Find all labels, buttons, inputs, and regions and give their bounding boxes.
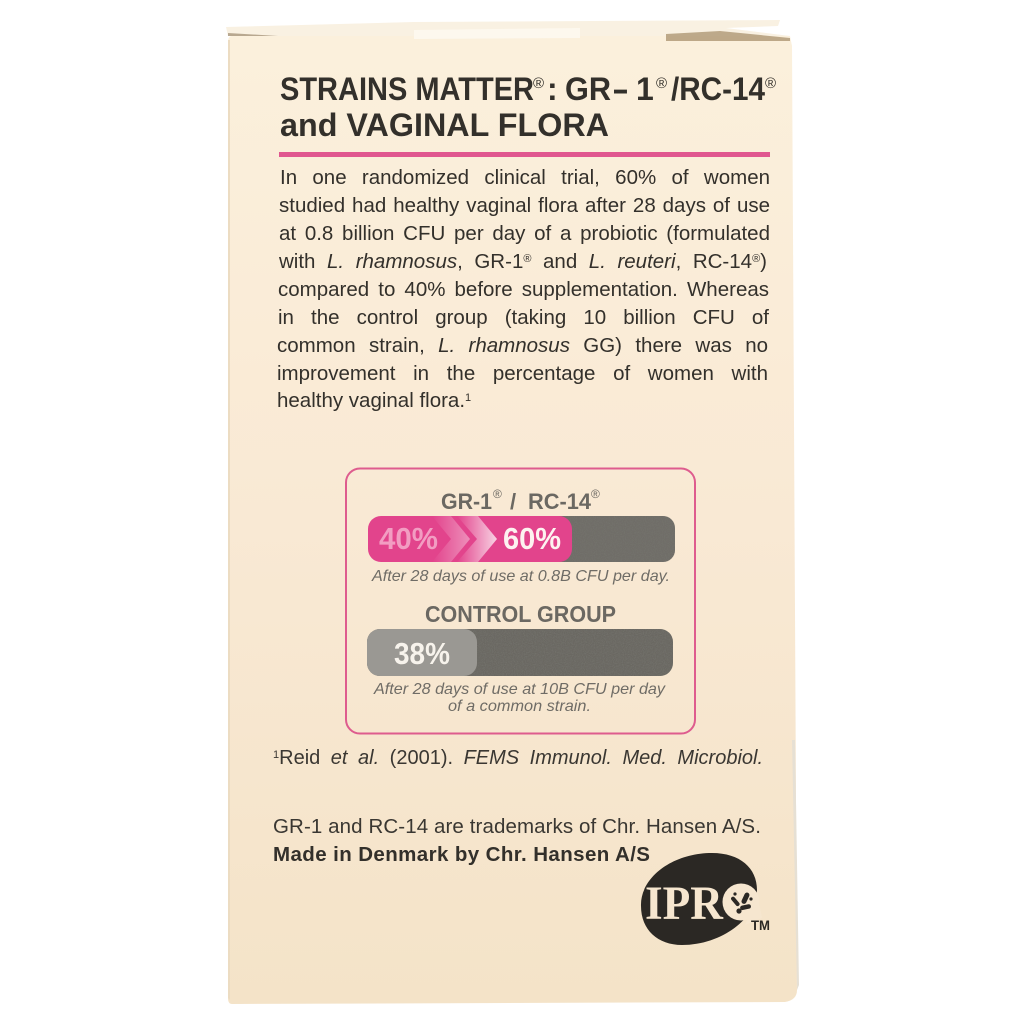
heading: GR-1 / RC-14: / — [510, 489, 516, 514]
left edge shading — [228, 40, 230, 1000]
bar: GR-1 / RC-14 result: 60% — [503, 521, 561, 556]
bar: GR-1 / RC-14 result: 40% — [379, 521, 438, 556]
body paragraph: studied had healthy vaginal flora after 28 days of use — [279, 194, 770, 217]
icon: IPRO logo: TM — [751, 917, 770, 933]
title: ® — [533, 75, 544, 92]
top flap — [226, 20, 790, 41]
heading: GR-1 / RC-14 — [441, 487, 600, 514]
title: ® — [656, 75, 667, 92]
body paragraph: compared to 40% before supplementation. Whereas — [278, 278, 769, 301]
heading: GR-1 / RC-14: ® — [591, 487, 600, 501]
icon: IPRO logo: IPR — [645, 877, 724, 930]
body paragraph: In one randomized clinical trial, 60% of women — [280, 166, 770, 189]
title: GR — [565, 71, 611, 107]
body paragraph: improvement in the percentage of women with — [277, 362, 768, 385]
caption: control bar — [373, 681, 666, 715]
title: STRAINS MATTER — [280, 71, 534, 107]
heading: control group: CONTROL GROUP — [425, 601, 616, 627]
heading: GR-1 / RC-14: ® — [493, 487, 502, 501]
heading: GR-1 / RC-14: RC-14 — [528, 489, 592, 514]
caption: GR-1 bar: After 28 days of use at 0.8B CFU per day. — [371, 568, 670, 585]
title: : — [547, 71, 558, 107]
bar: control group result: 38% — [394, 636, 450, 671]
title: and VAGINAL FLORA — [280, 107, 609, 143]
caption: control bar: After 28 days of use at 10B CFU per day — [373, 681, 666, 698]
pink title rule — [279, 152, 770, 157]
title: /RC-14 — [671, 71, 765, 107]
body paragraph: in the control group (taking 10 billion CFU of — [278, 306, 769, 329]
caption: control bar: of a common strain. — [448, 698, 591, 715]
body paragraph — [277, 166, 770, 412]
bar: GR-1 / RC-14 result — [368, 516, 675, 562]
title: 1 — [636, 71, 654, 107]
body paragraph: healthy vaginal flora.1 — [277, 389, 471, 412]
title — [280, 71, 776, 143]
bar: control group result — [367, 629, 673, 676]
trademark note: GR-1 and RC-14 are trademarks of Chr. Hansen A/S. — [273, 815, 761, 838]
icon: probiotic cells — [730, 892, 753, 914]
right edge of box — [792, 740, 799, 990]
heading: GR-1 / RC-14: GR-1 — [441, 489, 492, 514]
body paragraph: with L. rhamnosus, GR-1® and L. reuteri, RC-14®) — [279, 250, 767, 273]
citation: 1Reid et al. (2001). FEMS Immunol. Med. Microbiol. — [273, 747, 763, 769]
body paragraph: common strain, L. rhamnosus GG) there was no — [277, 334, 768, 357]
body paragraph: at 0.8 billion CFU per day of a probiotic (formulated — [279, 222, 770, 245]
title: ® — [765, 75, 776, 92]
manufacturer line: Made in Denmark by Chr. Hansen A/S — [273, 843, 650, 866]
title: - — [612, 71, 629, 107]
